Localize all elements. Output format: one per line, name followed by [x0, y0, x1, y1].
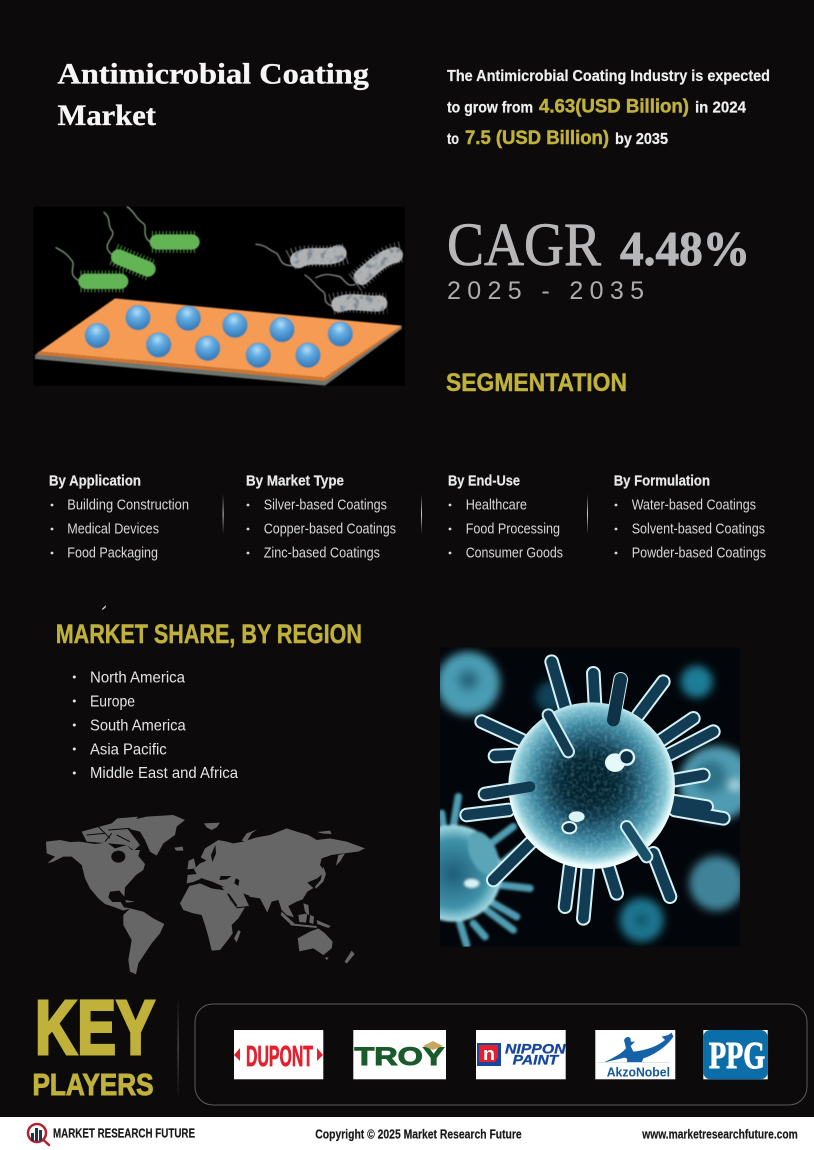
title: Market [58, 99, 156, 132]
logo: DuPont: DUPONT [246, 1041, 313, 1073]
green bacteria [81, 242, 197, 281]
segment: by end-use: Healthcare [466, 498, 527, 514]
region list [73, 669, 238, 782]
logo: Nippon Paint: n [483, 1044, 495, 1064]
footer logo icon [28, 1124, 49, 1145]
blurred background viruses [437, 652, 754, 942]
region list: Middle East and Africa [90, 765, 238, 782]
logo: Nippon Paint: NIPPON [505, 1041, 566, 1056]
CAGR statistic: 2025 - 2035 [447, 277, 644, 305]
logo: AkzoNobel: AkzoNobel [607, 1066, 670, 1080]
segment: by end-use: Food Processing [466, 522, 560, 538]
segment: by market type [246, 473, 396, 562]
market share heading: MARKET SHARE, BY REGION [56, 619, 362, 649]
forecast summary text: to grow from [447, 99, 533, 116]
image: virus microscopy [440, 648, 740, 947]
logo: Troy: TROY [354, 1043, 445, 1071]
main virus body [508, 702, 675, 869]
title [58, 58, 369, 132]
segment: by formulation: Solvent-based Coatings [632, 522, 765, 538]
footer bar [0, 1117, 814, 1150]
segment: by market type: Zinc-based Coatings [264, 546, 380, 562]
segment: by market type: Copper-based Coatings [264, 522, 396, 538]
logo: AkzoNobel [595, 1030, 675, 1080]
segment: by application: Building Construction [67, 498, 189, 514]
segment: by end-use [448, 473, 563, 562]
forecast summary text: in 2024 [695, 99, 746, 116]
logo: PPG [703, 1030, 768, 1079]
silver ions [85, 305, 353, 368]
logo: DuPont [234, 1030, 323, 1079]
key players heading: PLAYERS [32, 1067, 154, 1102]
key players heading [32, 985, 155, 1102]
forecast summary text: by 2035 [615, 131, 668, 148]
region list: North America [90, 669, 185, 686]
logo: PPG: PPG [709, 1035, 765, 1077]
segment: by application: Medical Devices [67, 522, 159, 538]
segment: by end-use: Consumer Goods [466, 546, 563, 562]
CAGR statistic: CAGR [447, 212, 601, 279]
forecast summary text: to [447, 131, 459, 148]
footer bar: MARKET RESEARCH FUTURE [53, 1126, 195, 1140]
region list: Europe [90, 693, 135, 710]
segment: by application: Food Packaging [67, 546, 158, 562]
key players panel [195, 1004, 807, 1105]
main virus spikes behind body [467, 662, 723, 918]
coated plate [35, 326, 402, 386]
footer bar: Copyright © 2025 Market Research Future [315, 1128, 522, 1142]
segment: by formulation [614, 473, 766, 562]
virus pores [562, 750, 634, 833]
segment: by market type: By Market Type [246, 473, 344, 490]
segment: by formulation: Powder-based Coatings [632, 546, 766, 562]
main virus spikes on body [487, 679, 647, 857]
key players heading: KEY [35, 985, 155, 1071]
region list: South America [90, 717, 186, 734]
title: Antimicrobial Coating [58, 58, 369, 90]
CAGR statistic: 4.48% [620, 221, 750, 276]
segment: by application [49, 473, 189, 562]
CAGR statistic [447, 212, 750, 305]
forecast summary text [447, 68, 770, 149]
segment: by formulation: Water-based Coatings [632, 498, 756, 514]
segment: by application: By Application [49, 473, 141, 490]
logo: Troy [353, 1030, 446, 1079]
grey bacteria [291, 252, 403, 304]
forecast summary text: 7.5 (USD Billion) [465, 128, 609, 149]
flagella [56, 207, 355, 307]
world map [46, 815, 365, 974]
image: antimicrobial coated surface with bacteria [33, 207, 405, 386]
logo: Nippon Paint: PAINT [513, 1053, 560, 1068]
segment: by formulation: By Formulation [614, 473, 710, 490]
segment: by end-use: By End-Use [448, 473, 520, 490]
left foreground virus [440, 791, 536, 947]
forecast summary text: The Antimicrobial Coating Industry is expected [447, 68, 770, 85]
forecast summary text: 4.63(USD Billion) [539, 96, 689, 117]
region list: Asia Pacific [90, 741, 167, 758]
stray mark [102, 605, 106, 610]
segmentation heading: SEGMENTATION [446, 369, 627, 397]
segment: by market type: Silver-based Coatings [264, 498, 387, 514]
logo: Nippon Paint [476, 1030, 566, 1079]
